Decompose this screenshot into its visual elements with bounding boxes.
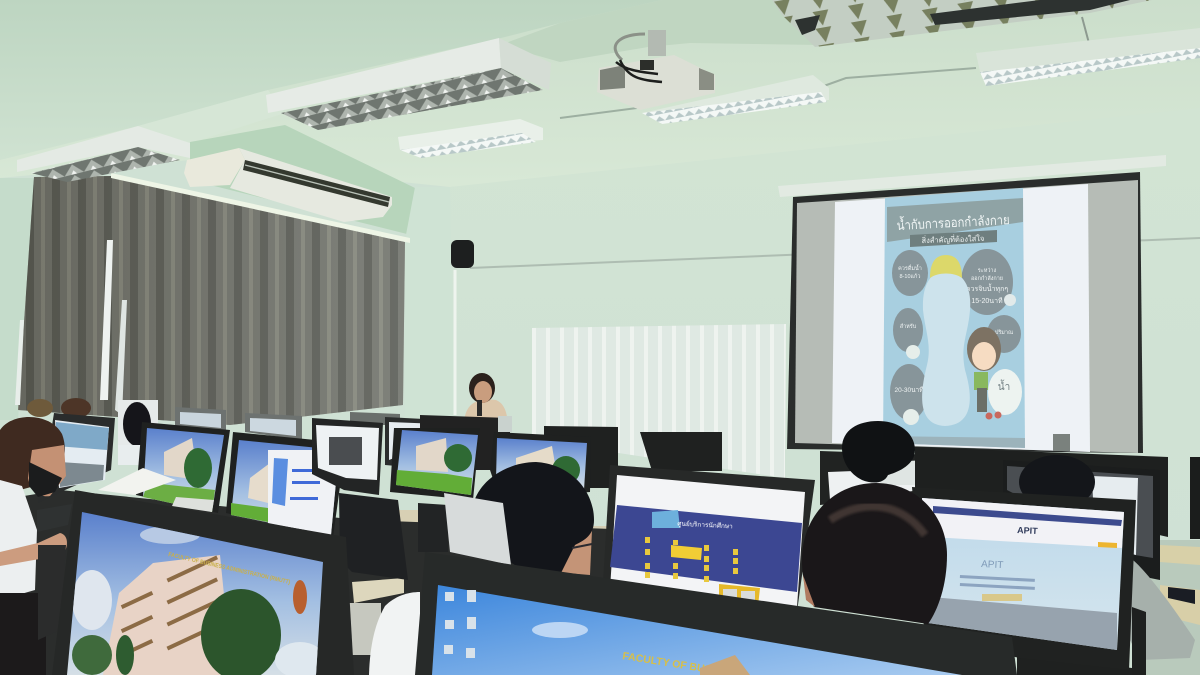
poster on screen: น้ำ [998,379,1010,393]
monitor: building wallpaper 2 [390,428,480,500]
presenter [464,373,508,423]
wall speaker [451,240,474,268]
screen banner housing [778,155,1166,197]
student head back left [842,421,915,483]
paper held by student [98,468,176,495]
poster on screen: 20-30นาที [894,386,924,394]
monitor: APIT website: APIT [1017,525,1038,536]
poster on screen: 15-20นาที [971,297,1003,305]
monitor row: mid left [38,413,115,503]
monitor: APIT website: APIT [981,559,1004,571]
ceiling light: far right [976,28,1200,86]
ceiling light: small centre [398,119,543,158]
projection screen [787,172,1143,453]
middle right wall gap [785,450,830,500]
poster on screen [883,188,1025,448]
monitor stand area [1017,655,1132,675]
projector [597,30,715,110]
monitor: building wallpaper 1 [136,422,230,513]
poster on screen: ระหว่าง [978,268,997,274]
monitor: building wallpaper 3 [490,432,591,500]
ceiling light: large [266,38,551,130]
keyboard [37,504,72,532]
poster on screen: ออกกำลังกาย [971,275,1003,282]
monitor: front left with wallpaper: FACULTY OF BUSINESS ADMINISTRATION (RMUTT) [168,552,291,586]
chair at right [1132,607,1146,675]
monitor: form on wallpaper [226,432,346,537]
air conditioner [184,148,392,222]
back heads [27,398,151,465]
back row monitors [118,400,722,488]
student right in grey shirt [1130,560,1195,660]
poster on screen: สิ่งสำคัญที่ต้องใส่ใจ [921,233,984,245]
poster on screen: 8-10แก้ว [900,273,920,280]
ceiling light: left [17,126,190,182]
student head front centre [802,483,947,624]
window blinds [15,173,410,425]
poster on screen: น้ำกับการออกกำลังกาย [896,210,1010,233]
monitor: front centre with wallpaper [415,552,1017,675]
monitor: university portal [602,465,815,612]
monitor: front left with wallpaper [52,490,354,675]
monitor: university portal: ศูนย์บริการนักศึกษา [677,520,733,530]
desks and chairs [0,490,640,675]
poster on screen: สำหรับ [900,323,917,330]
ceiling light: top right [772,0,1152,47]
student head and white shirt centre [369,462,594,675]
poster on screen: ควรดื่มน้ำ [898,264,922,272]
whiteboard [532,324,786,478]
monitor: APIT website [912,487,1136,670]
right back monitors [820,447,1200,675]
woman with face mask [0,417,67,675]
student head back right [1019,455,1095,509]
poster on screen: ควรจิบน้ำทุกๆ [966,282,1008,293]
paper sheet [444,493,511,565]
poster on screen: ปริมาณ [995,329,1013,336]
ceiling light: right of projector [642,75,829,124]
monitor: white document [312,418,383,495]
